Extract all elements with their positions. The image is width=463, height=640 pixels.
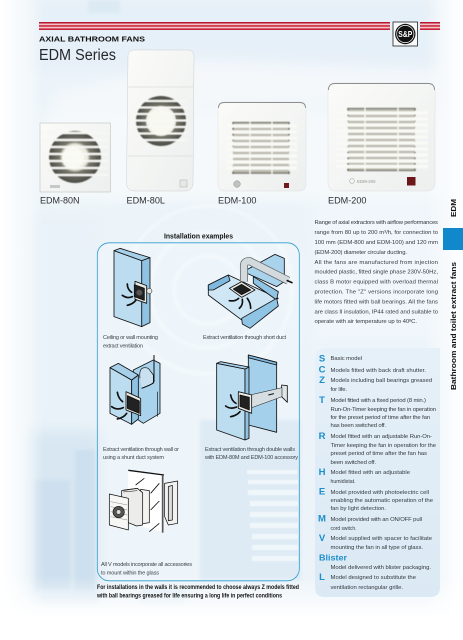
key: Z: [319, 375, 432, 393]
key: T: T: [319, 395, 325, 406]
caption: All V models incorporate all accessories: [101, 562, 192, 568]
caption: with EDM-80M and EDM-100 accessory: [204, 455, 298, 461]
illustration: mounting within glass: [109, 470, 178, 533]
key: E: fan by light detection.: [330, 506, 386, 512]
product labels: [40, 195, 366, 205]
illustration: short duct: [208, 254, 292, 328]
key: S: [319, 354, 362, 364]
description paragraph: moulded plastic, fitted single phase 230V-50Hz,: [314, 270, 438, 276]
key: T: for the preset period of time after the fan: [330, 415, 430, 421]
key: H: H: [319, 467, 326, 478]
side tab: EDM: EDM: [449, 199, 458, 217]
caption: extract ventilation: [103, 344, 143, 350]
key: R: [319, 431, 437, 466]
installation note: with ball bearings greased for life ensuring a long life in perfect conditions: [96, 593, 283, 599]
key: R: been switched off.: [330, 460, 376, 466]
description paragraph: class B motor equipped with overload thermal: [314, 280, 438, 286]
product: EDM-80L fan: [126, 50, 194, 191]
title: EDM Series: [39, 47, 116, 64]
key: E: [319, 486, 434, 512]
caption: to mount within the glass: [101, 570, 159, 576]
key: Z: for life.: [330, 387, 347, 393]
logo: S&P: [393, 22, 418, 46]
key: L: ventilation rectangular grille.: [330, 585, 403, 591]
panel: model key: [315, 348, 440, 597]
product labels: EDM-80N: [40, 195, 80, 205]
product labels: EDM-200: [328, 195, 366, 205]
key: T: [319, 395, 436, 429]
key: L: L: [319, 572, 325, 583]
key: T: Run-On-Timer keeping the fan in operation: [330, 407, 436, 413]
key: R: preset period of time after the fan has: [330, 451, 427, 457]
illustration: ceiling or wall mounting: [114, 248, 152, 327]
illustration: double walls: [217, 355, 287, 440]
product labels: EDM-80L: [126, 195, 165, 205]
key: E: Model provided with photoelectric cell: [330, 490, 429, 496]
key: H: [319, 467, 411, 485]
caption: Extract ventilation through double walls: [205, 447, 295, 453]
caption: [101, 562, 192, 576]
key: V: mounting the fan in all type of glass.: [330, 545, 423, 551]
description paragraph: [314, 220, 439, 325]
caption: using a shunt duct system: [103, 455, 164, 461]
key: Z: Z: [319, 375, 325, 386]
header stripes: [39, 22, 440, 30]
key: L: [319, 572, 417, 591]
description paragraph: 100 mm (EDM-800 and EDM-100) and 120 mm: [314, 240, 438, 246]
key: Blister: Blister: [319, 552, 348, 562]
key: R: Timer keeping the fan in operation for the: [330, 443, 437, 449]
key: T: Model fitted with a fixed period (8 min.): [330, 398, 426, 404]
key: C: C: [319, 364, 326, 376]
caption: [103, 447, 179, 461]
illustration: wall or shunt duct: [110, 355, 160, 424]
key: H: humidistat.: [330, 479, 356, 485]
product: EDM-100 fan: [218, 102, 306, 191]
description paragraph: (EDM-200) diameter circular ducting.: [314, 250, 407, 256]
key: Z: Models including ball bearings greased: [330, 378, 432, 384]
panel: installation examples: [97, 243, 299, 581]
key: C: [319, 364, 426, 376]
key: E: E: [319, 486, 325, 498]
caption: Extract ventilation through wall or: [103, 447, 179, 453]
description paragraph: protection. The "Z" versions incorporate long: [314, 290, 438, 296]
key: M: cord switch.: [330, 526, 357, 532]
product: EDM-200 fan: EDM-200: [357, 179, 376, 184]
key: H: Model fitted with an adjustable: [330, 470, 411, 476]
key: V: V: [319, 533, 326, 544]
key: E: enabling the automatic operation of the: [330, 498, 434, 504]
key: S: S: [319, 354, 325, 364]
key: C: Models fitted with back draft shutter.: [330, 368, 426, 374]
key: R: Model fitted with an adjustable Run-On-: [330, 434, 432, 440]
key: Blister: [319, 552, 431, 571]
side tab: category: Bathroom and toilet extract fans: [449, 262, 458, 390]
logo: S&P: S&P: [398, 29, 413, 39]
description paragraph: are class II insulation, IP44 rated and suitable to: [314, 310, 439, 316]
description paragraph: range from 80 up to 200 m³/h, for connection to: [314, 230, 439, 236]
product labels: EDM-100: [218, 195, 256, 205]
description paragraph: operate with air temperature up to 40ºC.: [314, 318, 417, 325]
caption: [204, 447, 298, 461]
product: EDM-200 fan: [328, 83, 435, 191]
caption: [103, 335, 158, 350]
key: Blister: Model delivered with blister packaging.: [330, 565, 431, 571]
key: M: Model provided with an ON/OFF pull: [330, 517, 422, 523]
key: V: Model supplied with spacer to facilitate: [330, 536, 433, 542]
key: M: M: [318, 514, 326, 524]
section label: AXIAL BATHROOM FANS: [39, 35, 145, 44]
key: L: Model designed to substitute the: [330, 575, 417, 581]
installation note: [96, 585, 299, 599]
side tab: blue block: [443, 228, 463, 250]
key: M: [318, 514, 422, 532]
description paragraph: Range of axial extractors with airflow performances: [314, 220, 438, 226]
key: V: [319, 533, 433, 551]
installation note: For installations in the walls it is recommended to choose always Z models fitted: [97, 585, 299, 591]
key: R: R: [319, 431, 326, 442]
caption: Ceiling or wall mounting: [103, 335, 158, 341]
heading: installation examples: Installation examples: [164, 232, 233, 240]
caption: Extract ventilation through short duct: [203, 335, 286, 341]
description paragraph: life motors fitted with ball bearings. All the fans: [314, 300, 438, 306]
product: EDM-80N fan: [40, 123, 110, 192]
key: T: has been switched off.: [330, 423, 386, 429]
description paragraph: All the fans are manufactured from injection: [314, 260, 438, 266]
key: S: Basic model: [330, 356, 362, 362]
